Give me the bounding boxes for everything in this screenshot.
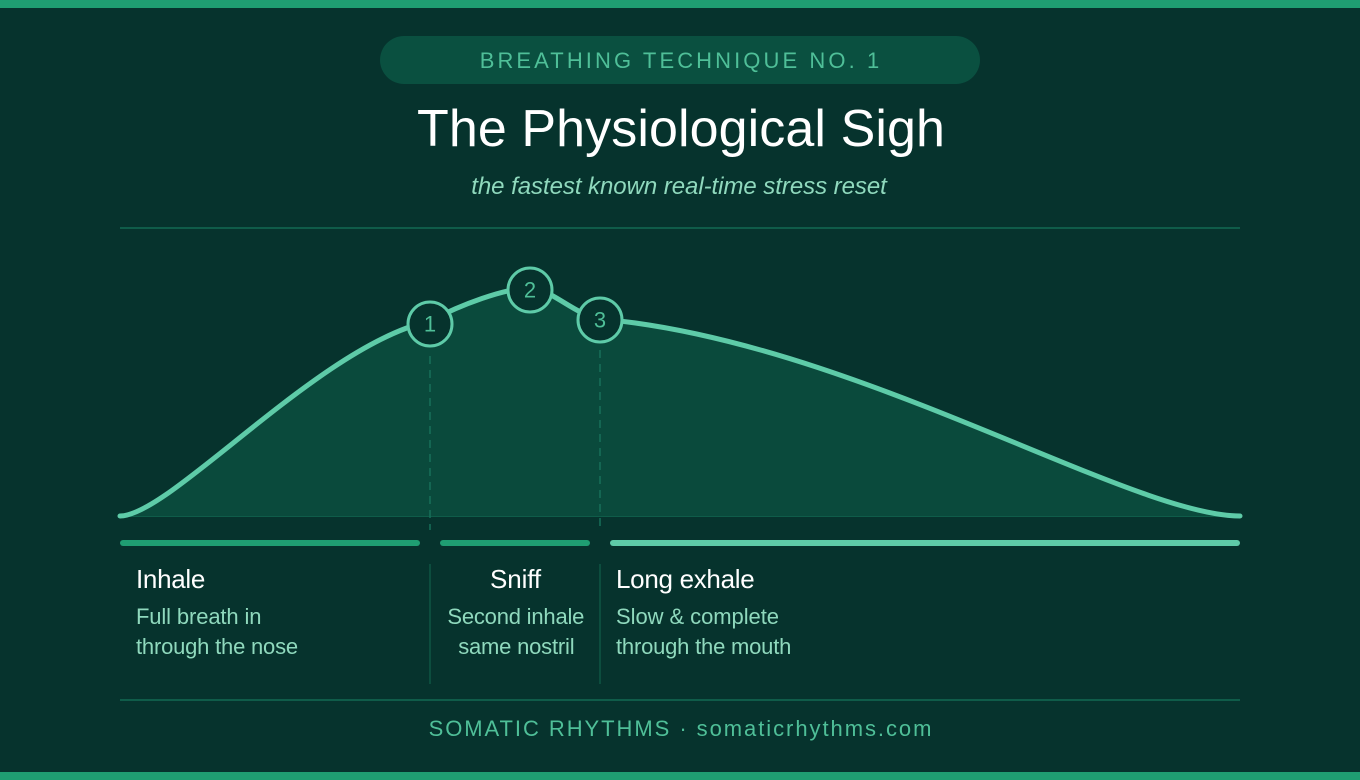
- inhale description: Full breath in: [136, 604, 261, 629]
- label: inhale: [136, 564, 298, 659]
- exhale description: Slow & complete: [616, 604, 779, 629]
- phase bar: inhale: [120, 540, 420, 546]
- exhale heading: Long exhale: [616, 564, 754, 594]
- inhale description: [136, 604, 298, 659]
- title: The Physiological Sigh: [417, 100, 945, 158]
- label: sniff: [447, 564, 584, 659]
- bottom accent bar: [0, 772, 1360, 780]
- sniff description: Second inhale: [447, 604, 584, 629]
- area under curve: [120, 288, 1240, 516]
- inhale description: through the nose: [136, 634, 298, 659]
- marker 2: 2: [524, 278, 536, 302]
- eyebrow text: BREATHING TECHNIQUE NO. 1: [480, 48, 882, 73]
- exhale description: through the mouth: [616, 634, 791, 659]
- marker 3: 3: [594, 308, 606, 332]
- sniff heading: Sniff: [490, 564, 541, 594]
- marker 2: [508, 268, 552, 312]
- top accent bar: [0, 0, 1360, 8]
- eyebrow badge background: [380, 36, 980, 84]
- marker 3: [578, 298, 622, 342]
- label: long exhale: [616, 564, 791, 659]
- guide line 1: [429, 356, 431, 530]
- sniff description: same nostril: [458, 634, 574, 659]
- marker 1: [408, 302, 452, 346]
- subtitle: the fastest known real-time stress reset: [471, 173, 887, 200]
- curve line: [120, 288, 1240, 516]
- marker 1: 1: [424, 312, 436, 336]
- footer: SOMATIC RHYTHMS · somaticrhythms.com: [429, 716, 933, 741]
- guide line 3: [599, 350, 601, 526]
- breath curve chart: [120, 268, 1240, 530]
- phase bar: exhale: [610, 540, 1240, 546]
- exhale description: [616, 604, 791, 659]
- phase bar: sniff: [440, 540, 590, 546]
- sniff description: [447, 604, 584, 659]
- inhale heading: Inhale: [136, 564, 205, 594]
